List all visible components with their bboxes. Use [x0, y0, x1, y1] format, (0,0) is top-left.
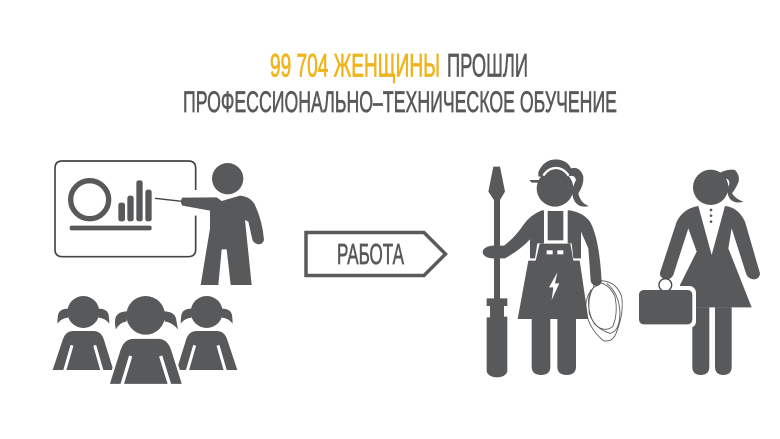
- apron bib: [548, 211, 563, 240]
- blouse buttons: [710, 209, 712, 223]
- board ring chart: [71, 181, 109, 219]
- arrow label: work: [306, 232, 446, 276]
- board bar chart: [118, 180, 152, 221]
- presentation board: [55, 161, 196, 257]
- apron pockets: [547, 250, 563, 254]
- electrician hair and cap: [538, 159, 589, 207]
- apron: [518, 244, 588, 319]
- businesswoman head: [693, 170, 728, 205]
- legs: [692, 307, 709, 375]
- title: ПРОШЛИ: [447, 48, 528, 84]
- cap brim: [529, 180, 540, 183]
- jacket and dress: [660, 206, 760, 307]
- teacher head: [212, 163, 243, 194]
- girl left: [53, 296, 113, 371]
- girl right: [177, 296, 237, 371]
- icon: businesswoman with briefcase: [636, 170, 760, 375]
- ponytail: [720, 170, 744, 203]
- icon: teacher at presentation board: [55, 161, 264, 285]
- briefcase outline gap: [636, 286, 696, 328]
- icon: female electrician with screwdriver: [483, 159, 622, 377]
- cable coil: [586, 281, 622, 341]
- icon: three schoolgirls: [53, 296, 237, 386]
- briefcase: [639, 290, 692, 324]
- board underline: [70, 226, 152, 230]
- screwdriver: [487, 167, 507, 377]
- electrician legs: [532, 319, 550, 375]
- electrician left arm and shoulders: [483, 210, 544, 258]
- title: [183, 48, 617, 119]
- lightning bolt: [549, 272, 559, 300]
- cap highlight: [543, 168, 569, 176]
- pointer: [155, 198, 182, 201]
- girl centre: [108, 296, 183, 386]
- briefcase handle: [659, 279, 672, 291]
- electrician head: [537, 170, 573, 207]
- title: 99 704 ЖЕНЩИНЫ: [270, 48, 440, 84]
- arrow label: work: РАБОТА: [337, 239, 404, 271]
- teacher body: [181, 196, 264, 285]
